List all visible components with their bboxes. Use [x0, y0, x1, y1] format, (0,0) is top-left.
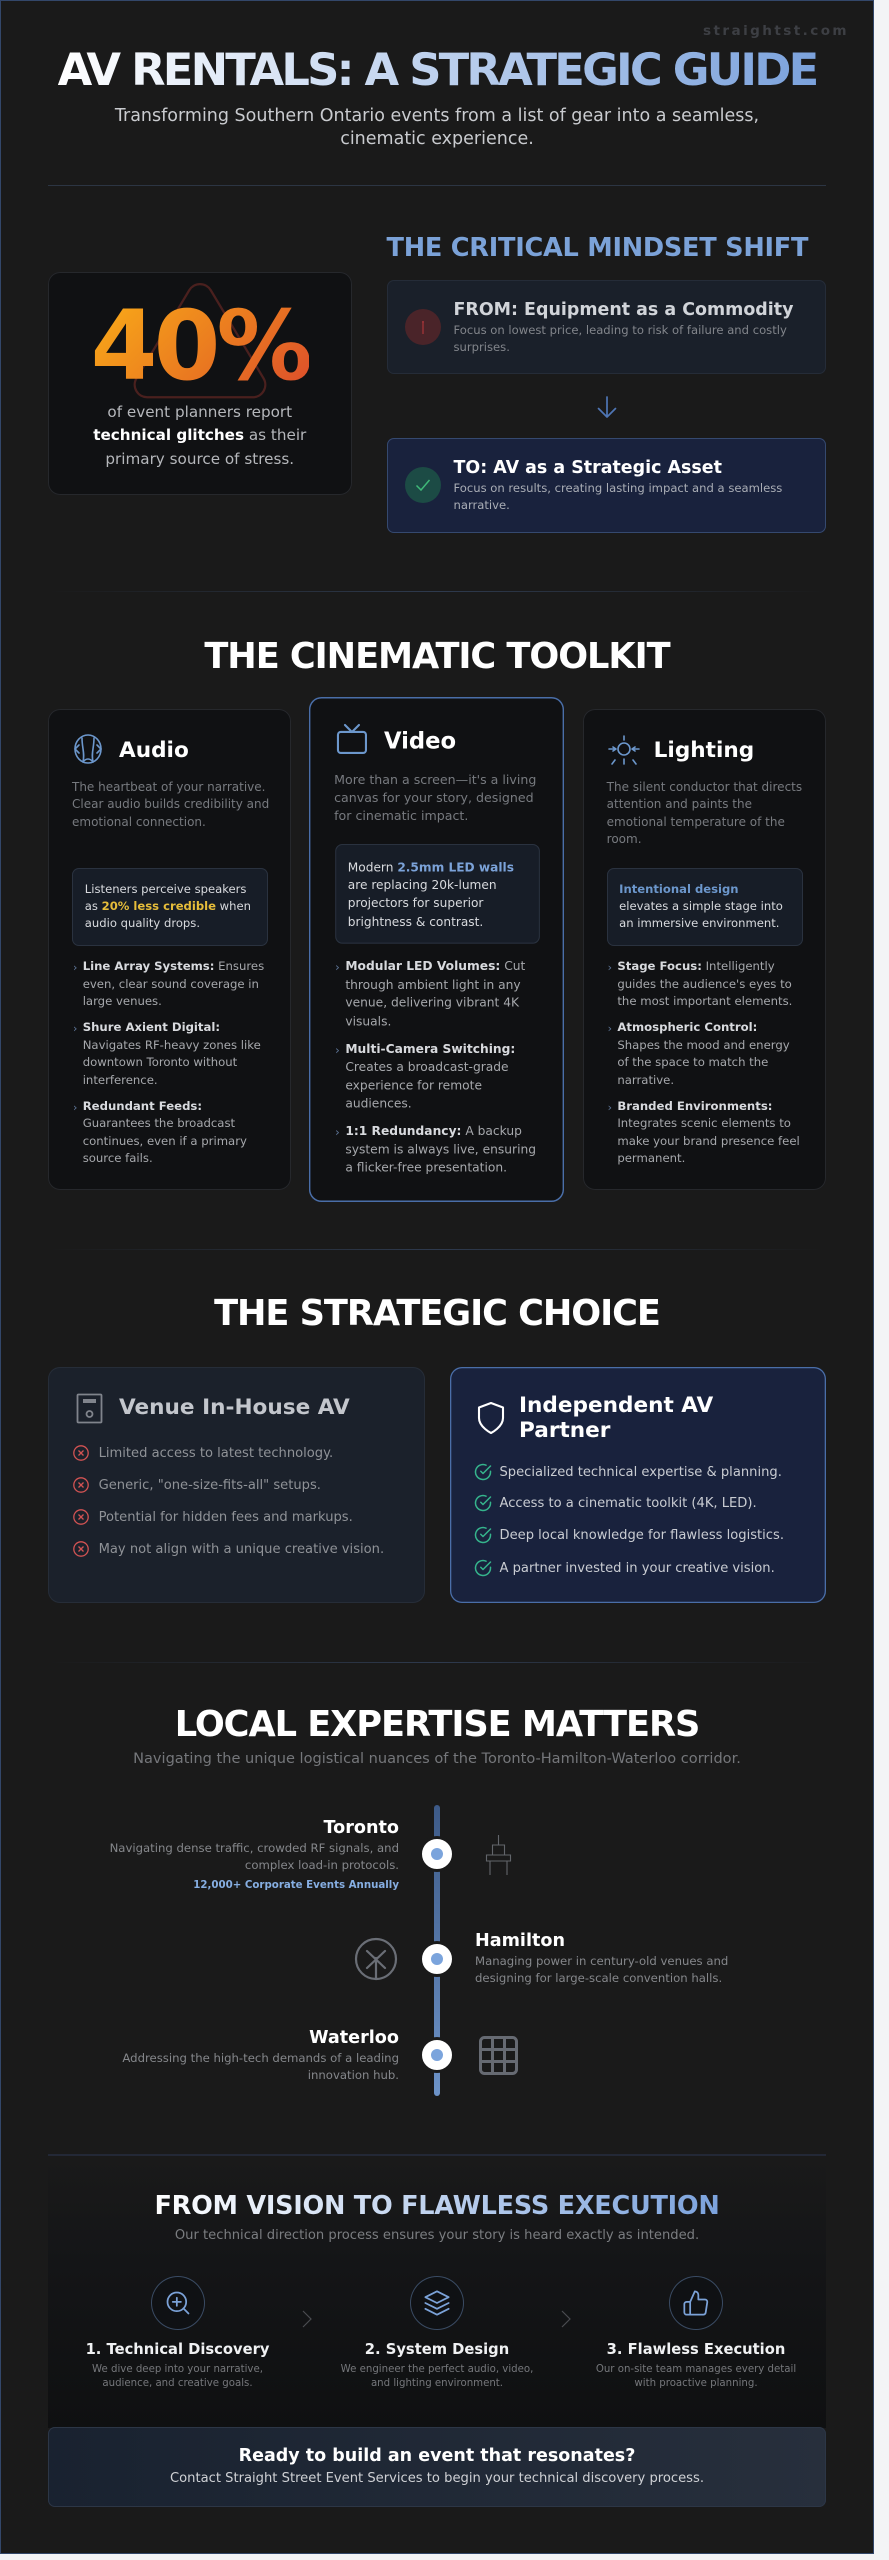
video feature list: ›	[335, 961, 340, 974]
audio feature list: large venues.	[83, 994, 162, 1008]
step 1 description	[92, 2364, 263, 2389]
video feature list: 1:1 Redundancy: A backup	[346, 1123, 522, 1138]
panel: to card	[387, 438, 826, 533]
icon: CN tower	[486, 1835, 511, 1875]
step 3 description: with proactive planning.	[634, 2378, 758, 2389]
panel: venue in-house	[48, 1367, 425, 1603]
step 3	[596, 2276, 796, 2389]
lighting callout: elevates a simple stage into	[619, 899, 783, 913]
timeline rail	[434, 1805, 440, 2096]
partner title	[519, 1392, 714, 1443]
heading: strategic choice: THE STRATEGIC CHOICE	[214, 1293, 660, 1334]
audio feature list: Navigates RF-heavy zones like	[83, 1038, 261, 1052]
Hamilton title: Hamilton	[475, 1930, 565, 1950]
video feature list: ›	[335, 1125, 340, 1139]
video feature list: system is always live, ensuring	[346, 1142, 536, 1156]
step 2 description: and lighting environment.	[371, 2378, 503, 2389]
partner list: Specialized technical expertise & planning.	[500, 1465, 782, 1480]
lighting callout: Intentional design	[619, 882, 739, 896]
icon: thumbs up	[669, 2276, 723, 2330]
audio description: Clear audio builds credibility and	[72, 797, 269, 811]
audio feature list: continues, even if a primary	[83, 1134, 247, 1148]
partner title: Independent AV	[519, 1392, 713, 1418]
lighting feature list: narrative.	[617, 1072, 674, 1086]
audio title: Audio	[119, 738, 189, 762]
video feature list: visuals.	[346, 1014, 392, 1028]
panel: 40% statistic	[48, 272, 352, 495]
audio feature list	[73, 959, 264, 1165]
lighting description: emotional temperature of the	[607, 815, 785, 829]
Toronto statistic: 12,000+ Corporate Events Annually	[193, 1879, 399, 1891]
venue list: May not align with a unique creative vision.	[99, 1542, 384, 1557]
node: Hamilton	[419, 1941, 455, 1977]
video feature list: a flicker-free presentation.	[346, 1160, 507, 1175]
video feature list: experience for remote	[346, 1078, 482, 1092]
audio description: The heartbeat of your narrative.	[72, 780, 265, 794]
audio callout: Listeners perceive speakers	[85, 882, 246, 896]
audio feature list: source fails.	[83, 1151, 153, 1165]
to description: narrative.	[454, 498, 510, 512]
step 1	[86, 2276, 270, 2389]
lighting feature list	[608, 959, 800, 1165]
partner list: Access to a cinematic toolkit (4K, LED).	[500, 1496, 757, 1511]
icon: video screen	[336, 724, 367, 754]
CTA text: Contact Straight Street Event Services to begin your technical discovery process.	[170, 2470, 704, 2486]
lighting feature list: Stage Focus: Intelligently	[617, 959, 775, 973]
statistic caption: primary source of stress.	[105, 450, 294, 468]
icon: green check	[405, 467, 441, 503]
chevron	[562, 2310, 571, 2328]
to description	[454, 480, 782, 512]
from description	[454, 322, 787, 354]
lighting feature list: make your brand presence feel	[617, 1134, 800, 1148]
video description: canvas for your story, designed	[334, 790, 534, 805]
audio callout: as 20% less credible when	[85, 899, 251, 913]
audio feature list: ›	[73, 961, 77, 974]
audio feature list: Shure Axient Digital:	[83, 1020, 220, 1034]
video feature list: through ambient light in any	[346, 977, 521, 992]
lighting feature list: permanent.	[617, 1151, 685, 1165]
Hamilton description: Managing power in century-old venues and	[475, 1954, 728, 1968]
partner list	[474, 1464, 784, 1576]
Waterloo title: Waterloo	[309, 2028, 399, 2048]
lighting feature list: Branded Environments:	[617, 1098, 772, 1112]
partner list: A partner invested in your creative vision.	[500, 1561, 775, 1576]
step 3 description: Our on-site team manages every detail	[596, 2364, 796, 2375]
step 1 description: audience, and creative goals.	[102, 2378, 253, 2389]
heading: cinematic toolkit: THE CINEMATIC TOOLKIT	[204, 636, 670, 677]
venue list: Potential for hidden fees and markups.	[99, 1510, 353, 1525]
Hamilton description: designing for large-scale convention halls.	[475, 1971, 722, 1985]
audio feature list: even, clear sound coverage in	[83, 976, 259, 990]
CTA heading: Ready to build an event that resonates?	[239, 2446, 635, 2466]
Hamilton description	[475, 1954, 728, 1985]
audio callout	[72, 868, 268, 946]
audio feature list: ›	[73, 1100, 77, 1114]
lighting feature list: ›	[608, 1100, 612, 1114]
heading: mindset shift: THE CRITICAL MINDSET SHIFT	[386, 233, 808, 263]
lighting feature list: ›	[608, 1022, 612, 1035]
subtitle	[114, 106, 759, 149]
video feature list: ›	[335, 1043, 340, 1057]
venue list: Limited access to latest technology.	[99, 1446, 333, 1461]
video callout: are replacing 20k-lumen	[348, 878, 497, 892]
panel: lighting	[583, 709, 826, 1190]
lighting callout: an immersive environment.	[619, 916, 779, 930]
call to action	[48, 2426, 826, 2507]
from description: Focus on lowest price, leading to risk of failure and costly	[454, 322, 787, 336]
Toronto description	[110, 1841, 399, 1872]
video feature list: venue, delivering vibrant 4K	[346, 995, 519, 1010]
step 1 description: We dive deep into your narrative,	[92, 2364, 263, 2375]
subtitle: cinematic experience.	[340, 129, 534, 149]
video callout: projectors for superior	[348, 896, 484, 911]
lighting feature list: ›	[608, 961, 612, 974]
lighting description: The silent conductor that directs	[607, 780, 802, 794]
audio feature list: Line Array Systems: Ensures	[83, 959, 264, 973]
Toronto description: Navigating dense traffic, crowded RF signals, and	[110, 1841, 399, 1855]
icon: warning circle	[405, 309, 441, 345]
from heading: FROM: Equipment as a Commodity	[454, 300, 793, 320]
audio feature list: Guarantees the broadcast	[83, 1116, 235, 1130]
icon: speaker	[76, 1394, 102, 1424]
icon: grid	[479, 2036, 518, 2075]
video feature list	[335, 958, 536, 1175]
lighting feature list: Atmospheric Control:	[617, 1020, 757, 1034]
chevron	[302, 2310, 312, 2328]
panel: audio	[48, 709, 291, 1190]
heading: local expertise: LOCAL EXPERTISE MATTERS	[175, 1704, 699, 1745]
step 2	[341, 2276, 533, 2389]
local expertise subheading: Navigating the unique logistical nuances of the Toronto-Hamilton-Waterloo corridor.	[133, 1750, 741, 1767]
audio feature list: interference.	[83, 1072, 158, 1086]
video title: Video	[384, 728, 456, 754]
audio feature list: downtown Toronto without	[83, 1055, 237, 1069]
icon: shield	[478, 1402, 504, 1434]
step 3 title: 3. Flawless Execution	[607, 2341, 785, 2358]
lighting callout	[607, 868, 803, 946]
video description	[334, 772, 537, 823]
video callout: brightness & contrast.	[348, 914, 484, 929]
audio description: emotional connection.	[72, 815, 206, 829]
to description: Focus on results, creating lasting impact and a seamless	[454, 480, 782, 494]
partner title: Partner	[519, 1418, 610, 1443]
venue list	[73, 1445, 384, 1557]
video feature list: Modular LED Volumes: Cut	[346, 958, 526, 973]
watermark: straightst.com	[703, 23, 849, 39]
lighting description	[606, 780, 802, 846]
step 3 description	[596, 2364, 796, 2389]
timeline	[422, 1805, 452, 2096]
subtitle: Transforming Southern Ontario events from a list of gear into a seamless,	[115, 106, 759, 126]
to heading: TO: AV as a Strategic Asset	[454, 458, 722, 478]
lighting feature list: guides the audience's eyes to	[617, 976, 792, 990]
panel: independent AV partner	[450, 1367, 826, 1603]
venue list: Generic, "one-size-fits-all" setups.	[99, 1478, 321, 1493]
Toronto description: complex load-in protocols.	[245, 1858, 399, 1872]
video callout	[335, 844, 540, 944]
Waterloo description: innovation hub.	[308, 2068, 399, 2082]
lighting title: Lighting	[654, 738, 754, 762]
step 2 description	[341, 2364, 533, 2389]
icon: warning triangle	[134, 283, 266, 398]
video description: More than a screen—it's a living	[334, 772, 537, 787]
icon: audio	[74, 734, 102, 764]
statistic caption: of event planners report	[107, 402, 292, 420]
partner list: Deep local knowledge for flawless logistics.	[500, 1528, 784, 1543]
video feature list: audiences.	[346, 1096, 412, 1111]
video callout: Modern 2.5mm LED walls	[348, 859, 514, 874]
video description: for cinematic impact.	[334, 809, 469, 823]
big number: 40%: 40%	[91, 290, 309, 402]
node: Waterloo	[419, 2037, 455, 2073]
node: Toronto	[419, 1836, 455, 1872]
title: AV RENTALS: A STRATEGIC GUIDE	[58, 43, 816, 96]
statistic caption: technical glitches as their	[93, 426, 306, 444]
venue title: Venue In-House AV	[119, 1395, 350, 1420]
lighting description: room.	[607, 832, 642, 846]
icon: Hamilton circle	[354, 1938, 398, 1980]
panel: from card	[387, 280, 826, 374]
audio description	[72, 780, 269, 829]
process subheading: Our technical direction process ensures your story is heard exactly as intended.	[175, 2228, 699, 2243]
step 1 title: 1. Technical Discovery	[86, 2341, 269, 2358]
statistic caption	[93, 402, 306, 468]
step 2 description: We engineer the perfect audio, video,	[341, 2364, 533, 2375]
icon: lighting	[608, 735, 640, 765]
lighting feature list: Shapes the mood and energy	[617, 1038, 790, 1052]
lighting feature list: of the space to match the	[617, 1055, 768, 1069]
Waterloo description: Addressing the high-tech demands of a leading	[122, 2051, 399, 2065]
arrow: from to	[598, 396, 616, 418]
lighting feature list: Integrates scenic elements to	[617, 1116, 791, 1130]
Toronto title: Toronto	[323, 1818, 399, 1838]
process heading: FROM VISION TO FLAWLESS EXECUTION	[154, 2191, 720, 2221]
icon: layers	[410, 2276, 464, 2330]
audio callout: audio quality drops.	[85, 916, 200, 930]
from description: surprises.	[454, 340, 510, 354]
step 2 title: 2. System Design	[365, 2341, 509, 2358]
video feature list: Multi-Camera Switching:	[346, 1041, 516, 1056]
panel: video	[309, 697, 565, 1202]
icon: magnifier	[151, 2276, 205, 2330]
audio feature list: ›	[73, 1022, 77, 1035]
panel: process	[48, 2156, 826, 2428]
audio feature list: Redundant Feeds:	[83, 1098, 202, 1112]
lighting feature list: the most important elements.	[617, 994, 792, 1008]
Waterloo description	[122, 2051, 399, 2082]
lighting description: attention and paints the	[607, 797, 752, 811]
video feature list: Creates a broadcast-grade	[346, 1059, 509, 1074]
